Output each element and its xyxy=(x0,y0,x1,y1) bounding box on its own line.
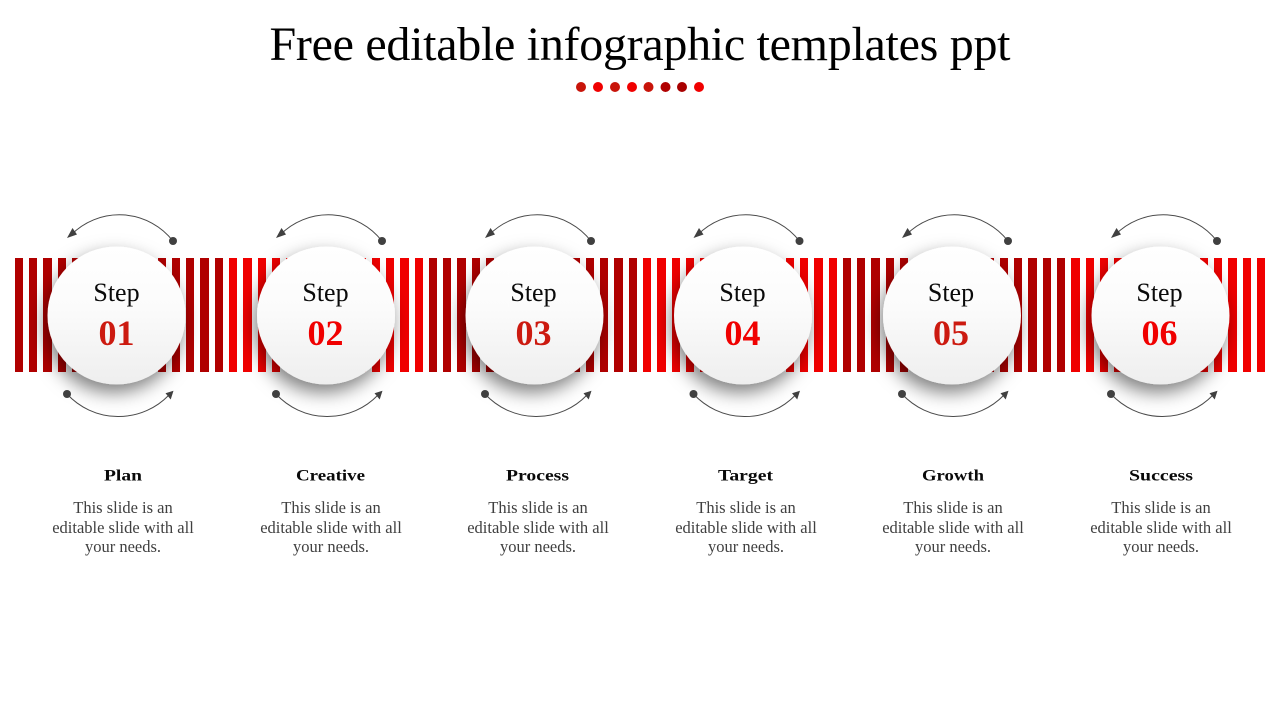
step 2 bottom arrow xyxy=(272,390,382,417)
title dots xyxy=(576,82,704,92)
text block: Plan: editable slide with all xyxy=(52,518,194,537)
text block: Creative: editable slide with all xyxy=(260,518,402,537)
step 5 number: 05 xyxy=(933,313,969,353)
step 5 circle xyxy=(883,246,1021,384)
step 4 top arrow xyxy=(694,215,804,245)
step 4 circle xyxy=(674,246,812,384)
text block: Target xyxy=(675,468,817,556)
text block: Growth: Growth xyxy=(922,468,984,484)
step 4 number: 04 xyxy=(724,313,760,353)
text block: Plan xyxy=(52,468,194,556)
text block: Growth: editable slide with all xyxy=(882,518,1024,537)
step 1 top arrow xyxy=(67,215,177,245)
step 6 xyxy=(1092,215,1230,417)
text block: Creative: your needs. xyxy=(293,537,369,556)
text block: Growth: your needs. xyxy=(915,537,991,556)
step 6 circle xyxy=(1092,246,1230,384)
step 6 word: Step xyxy=(1136,278,1183,307)
step 6 number: 06 xyxy=(1142,313,1178,353)
text block: Growth xyxy=(882,468,1024,556)
text block: Target: Target xyxy=(718,468,774,484)
step 2 circle xyxy=(257,246,395,384)
text block: Plan: your needs. xyxy=(85,537,161,556)
text block: Process xyxy=(467,468,609,556)
step 3 number: 03 xyxy=(516,313,552,353)
text block: Success: your needs. xyxy=(1123,537,1199,556)
title: Free editable infographic templates ppt xyxy=(270,18,1011,71)
text block: Target: This slide is an xyxy=(696,498,796,517)
step 3 xyxy=(466,215,604,417)
text block: Creative xyxy=(260,468,402,556)
text block: Process: your needs. xyxy=(500,537,576,556)
step 1 circle xyxy=(48,246,186,384)
step 3 circle xyxy=(466,246,604,384)
text block: Creative: Creative xyxy=(296,468,365,484)
step 6 top arrow xyxy=(1111,215,1221,245)
step 4 bottom arrow xyxy=(690,390,800,417)
text block: Plan: This slide is an xyxy=(73,498,173,517)
text block: Process: Process xyxy=(506,468,569,484)
step 1 xyxy=(48,215,186,417)
text block: Target: editable slide with all xyxy=(675,518,817,537)
step 4 word: Step xyxy=(719,278,766,307)
step 2 xyxy=(257,215,395,417)
step 5 top arrow xyxy=(902,215,1012,245)
text block: Success: Success xyxy=(1129,468,1193,484)
text block: Success: editable slide with all xyxy=(1090,518,1232,537)
step 5 xyxy=(883,215,1021,417)
text block: Plan: Plan xyxy=(104,468,142,484)
step 1 number: 01 xyxy=(98,313,134,353)
text block: Success: This slide is an xyxy=(1111,498,1211,517)
step 4 xyxy=(674,215,812,417)
text block: Growth: This slide is an xyxy=(903,498,1003,517)
step 1 bottom arrow xyxy=(63,390,174,417)
step 3 word: Step xyxy=(510,278,557,307)
step 2 number: 02 xyxy=(308,313,344,353)
text block: Process: editable slide with all xyxy=(467,518,609,537)
step 6 bottom arrow xyxy=(1107,390,1218,417)
text block: Creative: This slide is an xyxy=(281,498,381,517)
step 3 top arrow xyxy=(485,215,595,245)
text block: Success xyxy=(1090,468,1232,556)
step 2 word: Step xyxy=(302,278,349,307)
step 3 bottom arrow xyxy=(481,390,592,417)
step 5 word: Step xyxy=(928,278,974,307)
step 2 top arrow xyxy=(276,215,386,245)
step 1 word: Step xyxy=(93,278,140,307)
step 5 bottom arrow xyxy=(898,390,1008,417)
striped red band xyxy=(15,258,1265,372)
text block: Process: This slide is an xyxy=(488,498,588,517)
text block: Target: your needs. xyxy=(708,537,784,556)
